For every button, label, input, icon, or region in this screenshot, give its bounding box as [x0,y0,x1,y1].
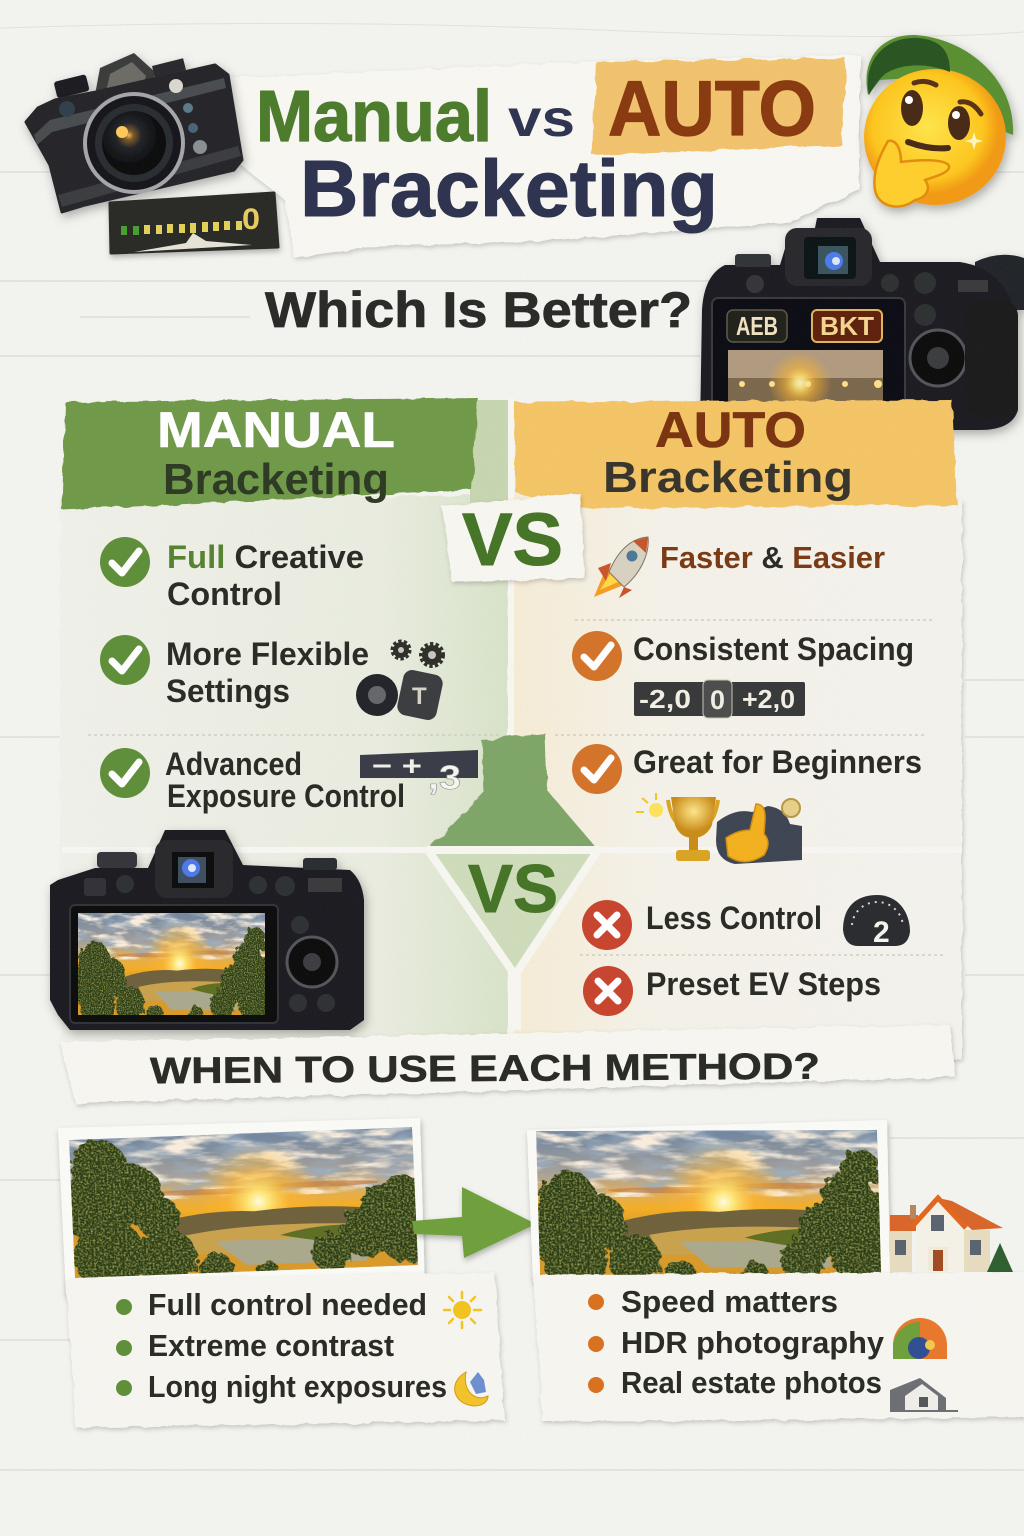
item: Advanced Exposure Control: Exposure Control [167,778,405,814]
camera: mirrorless back with landscape [50,830,364,1030]
icon: gears and dials [356,642,444,722]
triangle: lower VS: VS [468,851,558,927]
photo frame left [58,1118,425,1295]
heading: MANUAL: MANUAL [157,402,395,458]
icon: trophy and thumbs-up camera [636,793,802,864]
item: More Flexible Settings [100,635,369,709]
item: Advanced Exposure Control [100,746,405,814]
item: Preset EV Steps: Preset EV Steps [646,966,881,1002]
heading band: when to use each method [60,1025,955,1103]
triangle: lower VS [428,850,598,1030]
item: Great for Beginners [572,744,922,794]
item: Consistent Spacing: Consistent Spacing [633,631,914,667]
tag: AUTO background [592,58,846,155]
exposure meter panel: 0 [242,203,260,236]
heading: AUTO: AUTO [655,402,806,458]
item: More Flexible Settings: Settings [166,673,290,709]
question: Which Is Better?: Which Is Better? [265,282,692,338]
card: auto use cases [521,1120,1024,1422]
icon: exposure compensation tag [360,750,478,797]
VS tag: VS [462,498,563,581]
item: Great for Beginners: Great for Beginners [633,744,922,780]
item: Less Control: Less Control [646,900,822,936]
icon: gauge 2: 2 [873,916,890,949]
EV scale tag [634,680,805,718]
label: AUTO: AUTO [608,64,816,152]
faded header stripe [470,400,510,510]
label: Bracketing: Bracketing [300,144,718,233]
BKT tag: BKT [820,311,874,341]
notes paper left [66,1273,504,1428]
title: Manual vs AUTO Bracketing [256,58,846,233]
icon: gears and dials: T [412,683,427,710]
item: Less Control [582,900,822,950]
icon: small grey house [890,1378,958,1412]
camera: vintage film camera [26,53,242,212]
camera: DSLR back with AEB and BKT [700,218,1024,432]
heading: Bracketing left: Bracketing [163,455,389,504]
arrow: manual to auto [412,1187,536,1258]
EV scale tag: 0 [710,685,725,715]
list: manual: Long night exposures [148,1369,447,1404]
icon: HDR gauge [893,1318,947,1359]
list: manual [116,1287,447,1404]
title band: torn paper [225,55,860,258]
icon: sun [444,1292,481,1328]
EV scale tag: +2,0 [742,684,795,714]
item: Full Creative Control: Full Creative [167,539,364,575]
icon: rocket [594,537,648,598]
item: Full Creative Control [100,537,364,612]
item: More Flexible Settings: More Flexible [166,636,369,672]
icon: moon [455,1372,488,1406]
item: Consistent Spacing [572,631,914,681]
heading: Bracketing right: Bracketing [603,453,853,502]
icon: house illustration [890,1198,1013,1272]
icon: thinking emoji with green cap [864,35,1013,207]
item: Full Creative Control: Control [167,576,282,612]
list: auto: Speed matters [621,1284,838,1319]
notes paper right [533,1272,1024,1422]
right header [515,400,957,508]
item: Advanced Exposure Control: Advanced [165,746,302,782]
list: manual: Full control needed [148,1287,427,1322]
icon: gauge 2 [843,895,910,949]
item: Faster & Easier: Faster & Easier [660,540,885,575]
list: auto: Real estate photos [621,1365,882,1400]
list: auto [588,1284,885,1400]
right column body [512,495,962,1060]
icon: exposure compensation tag: ,3 [428,759,461,797]
label: vs: vs [508,90,575,148]
landscape photo left [55,1126,441,1293]
funnel: green watercolor [428,733,598,850]
list: manual: Extreme contrast [148,1328,394,1363]
icon: exposure compensation tag: − + [372,751,422,781]
exposure meter panel [110,193,278,253]
list: auto: HDR photography [621,1325,885,1360]
left column body [60,495,508,1040]
card: manual use cases [55,1118,504,1428]
item: Preset EV Steps [583,966,881,1016]
photo frame right [527,1120,890,1282]
heading band: when to use each method: WHEN TO USE EACH METHOD? [150,1046,820,1091]
left header [62,398,478,510]
label: Manual: Manual [256,77,492,157]
EV scale tag: -2,0 [639,684,691,714]
panel: comparison board [60,398,962,1060]
landscape photo right [521,1130,900,1292]
VS tag [442,493,585,582]
AEB tag: AEB [736,311,778,341]
